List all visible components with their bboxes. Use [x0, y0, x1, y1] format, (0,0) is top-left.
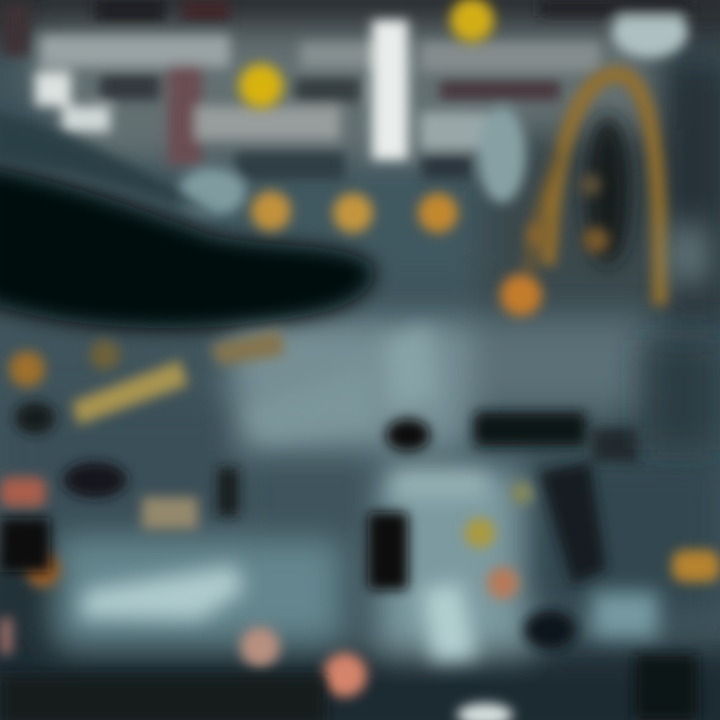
arm highlight: [0, 110, 225, 222]
upper background panel: [0, 0, 720, 320]
ring inner dark: [586, 115, 630, 265]
yellow lights: [239, 0, 494, 108]
lower dashboard labels: [0, 330, 720, 720]
orange ring: [528, 74, 660, 305]
dark arm shape: [0, 165, 375, 328]
lower background panel: [0, 320, 720, 720]
top window grid: [2, 0, 690, 216]
bright dashboard panels: [80, 325, 658, 662]
amber lights: [9, 174, 609, 599]
dark control shapes: [0, 402, 697, 720]
soft shading: [640, 225, 720, 450]
